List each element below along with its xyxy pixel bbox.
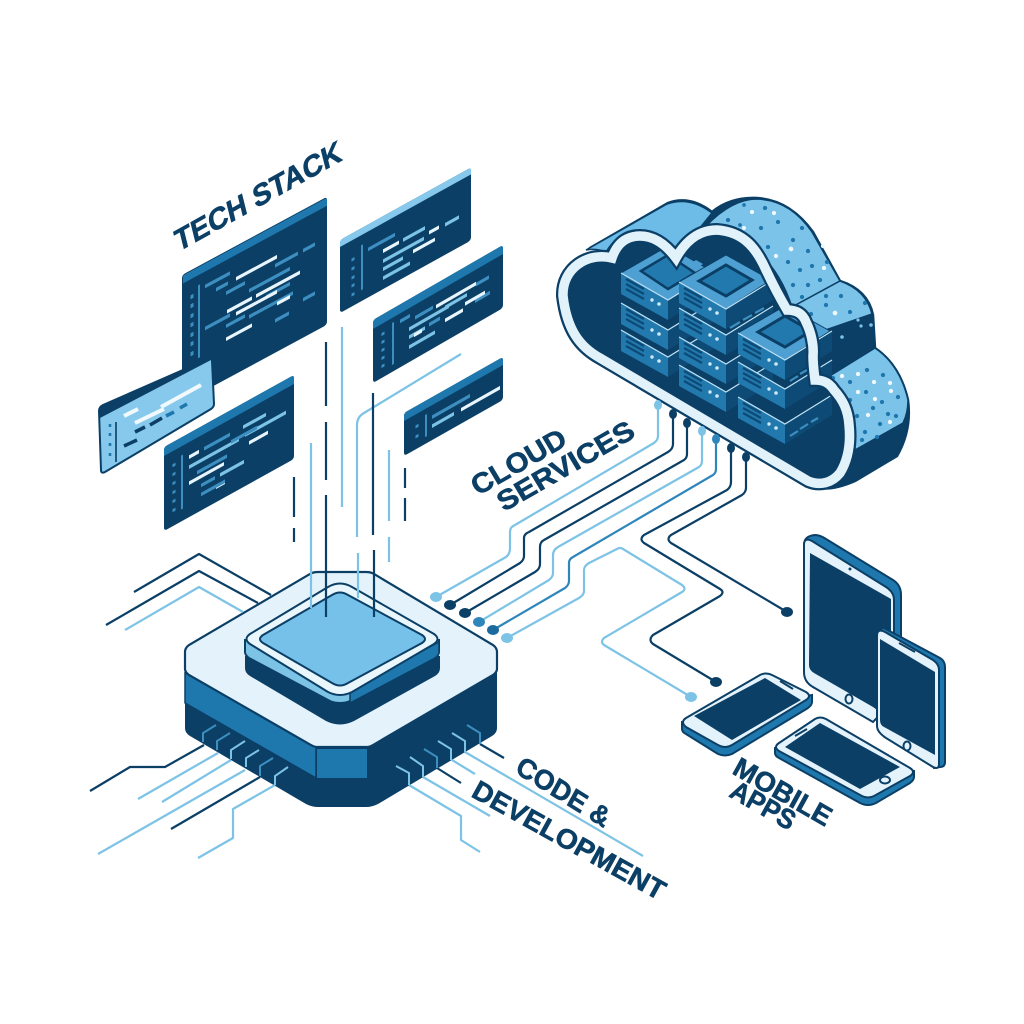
cloud rear lobe bbox=[586, 201, 712, 252]
vertical data lines between chip and code windows bbox=[294, 327, 461, 617]
servers: center stack bbox=[679, 255, 773, 412]
cloud ring outline bbox=[563, 230, 850, 483]
device: flat phone left bbox=[682, 674, 812, 756]
label: cloud services bbox=[465, 414, 640, 518]
connector dots: device side bbox=[685, 607, 793, 702]
chip socket shadow bbox=[245, 656, 440, 724]
chip raised frame bbox=[245, 584, 439, 703]
cloud white dots bbox=[742, 210, 893, 424]
panel: top code window bbox=[340, 167, 471, 313]
label: mobile apps: MOBILE bbox=[728, 753, 837, 833]
label: cloud services: CLOUD bbox=[465, 422, 572, 502]
cloud lower dots on dark bbox=[825, 318, 873, 347]
servers: right stack bbox=[738, 306, 832, 444]
chip blue front bbox=[317, 749, 367, 778]
panel: lower left code window bbox=[164, 375, 294, 531]
cloud extruded body bbox=[590, 198, 909, 489]
circuit lines: upper left bbox=[106, 554, 271, 630]
title: tech stack: TECH STACK bbox=[172, 134, 345, 258]
device: tall phone bbox=[877, 627, 945, 768]
server top right bbox=[738, 306, 830, 360]
chip: code and development bbox=[185, 572, 497, 807]
chip top face bbox=[185, 572, 497, 747]
chip dark base bbox=[185, 670, 497, 807]
connector dots: chip side bbox=[430, 592, 513, 643]
cloud inner dark fill bbox=[563, 230, 850, 483]
cloud dots bbox=[726, 204, 900, 442]
cloud dotted middle band bbox=[792, 281, 872, 334]
server top center bbox=[679, 255, 771, 309]
label: cloud services: SERVICES bbox=[491, 414, 640, 518]
connector dots: cloud side bbox=[654, 400, 750, 462]
label: code and development: CODE & bbox=[511, 752, 615, 834]
chip pins: right side bbox=[396, 725, 480, 785]
circuit lines: lower right bbox=[409, 744, 643, 856]
panel: main code window bbox=[182, 197, 327, 403]
cloud ring bbox=[563, 230, 850, 483]
cloud dotted top band bbox=[706, 199, 840, 307]
label: code and development: DEVELOPMENT bbox=[467, 775, 671, 906]
panel: light blue code window bbox=[99, 358, 214, 473]
servers: left stack bbox=[621, 246, 715, 377]
label: code and development bbox=[467, 752, 671, 906]
chip pins: left side bbox=[203, 725, 288, 785]
panel: small code window bbox=[404, 357, 503, 456]
connector traces: chip to cloud bbox=[430, 400, 793, 702]
cloud: server cloud bbox=[563, 198, 909, 489]
server top left bbox=[621, 246, 715, 300]
panel: right code window bbox=[373, 245, 503, 383]
circuit lines: lower left bbox=[90, 745, 275, 858]
device: flat phone right bbox=[775, 718, 914, 805]
label: mobile apps: APPS bbox=[725, 776, 800, 837]
chip blue side bbox=[185, 673, 316, 778]
device: tablet bbox=[804, 535, 901, 722]
cloud dotted lower band bbox=[820, 348, 908, 450]
small light tab bbox=[690, 260, 703, 268]
